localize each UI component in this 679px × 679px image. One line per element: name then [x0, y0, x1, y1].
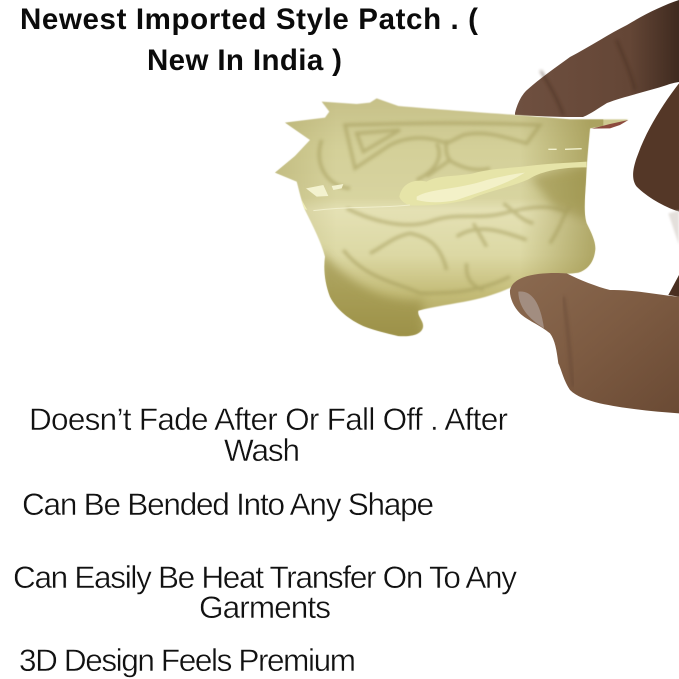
thumb	[510, 273, 679, 413]
embossed design lines	[319, 123, 570, 293]
feature: no fading	[29, 401, 508, 468]
feature: heat transfer: Garments	[199, 589, 331, 625]
feature: no fading: Wash	[224, 432, 300, 468]
product photo: hand holding bent patch	[270, 0, 679, 413]
lower finger fragment	[668, 275, 679, 297]
feature: bendable: Can Be Bended Into Any Shape	[22, 486, 434, 522]
patch	[270, 97, 628, 343]
right finger	[633, 83, 679, 212]
feature: heat transfer: Can Easily Be Heat Transfer On To Any	[13, 559, 517, 595]
feature: 3D design: 3D Design Feels Premium	[19, 642, 356, 678]
thumbnail	[518, 291, 544, 328]
feature: heat transfer	[13, 559, 517, 625]
patch darker lower-left shading	[320, 250, 423, 343]
finger highlight at right edge	[668, 211, 679, 245]
top finger	[515, 0, 679, 117]
title	[20, 3, 478, 77]
glossy highlight	[399, 162, 587, 205]
title: New In India )	[147, 44, 342, 77]
feature: no fading: Doesn’t Fade After Or Fall Off . After	[29, 401, 508, 437]
title: Newest Imported Style Patch . (	[20, 3, 478, 36]
red edge of patch backing	[592, 120, 628, 129]
patch darker right band	[530, 167, 590, 220]
